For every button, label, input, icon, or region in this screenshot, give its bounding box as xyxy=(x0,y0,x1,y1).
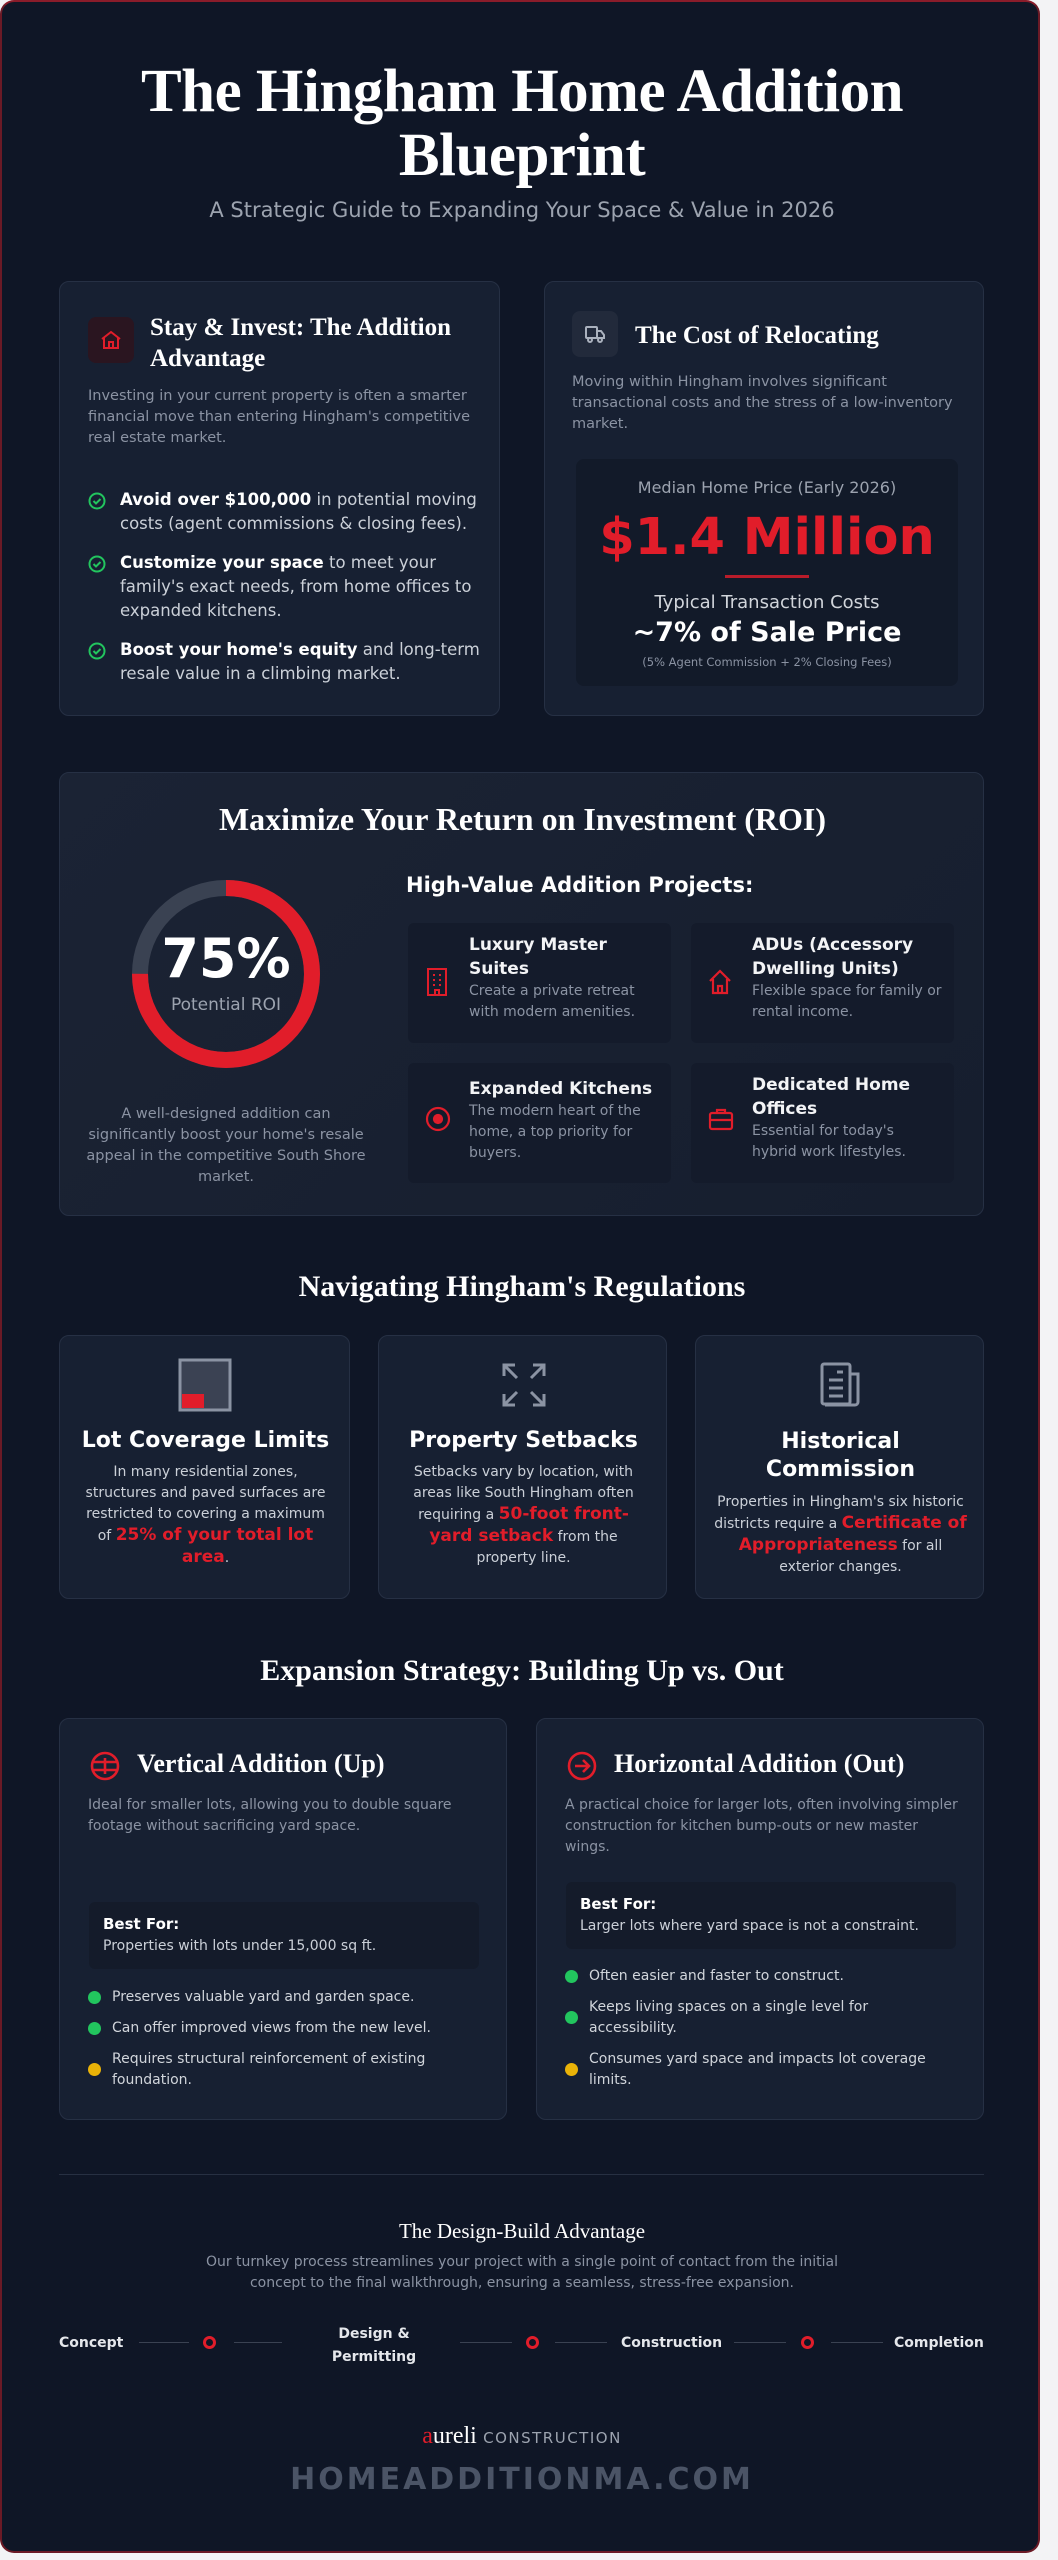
pros/cons list: Often easier and faster to construct. xyxy=(589,1968,844,1984)
bullet list: Boost your home's equity and long-term resale value in a climbing market. xyxy=(120,640,480,683)
icon: document xyxy=(820,1362,860,1406)
bullet list: Avoid over $100,000 in potential moving costs (agent commissions & closing fees). xyxy=(120,490,477,533)
pros/cons list: Consumes yard space and impacts lot coverage limits. xyxy=(589,2051,926,2088)
panel: horizontal xyxy=(536,1718,984,2120)
process timeline: Concept xyxy=(59,2335,123,2351)
best for box xyxy=(566,1882,956,1949)
panel: historical: Commission xyxy=(766,1457,915,1482)
panel: horizontal: A practical choice for larger lots, often involving simpler construction for kitchen bump-outs or new master wings. xyxy=(565,1797,958,1855)
panel: setbacks: Property Setbacks xyxy=(409,1428,638,1453)
process timeline: Design & Permitting xyxy=(332,2326,416,2365)
process timeline: Completion xyxy=(894,2335,984,2351)
icon: horizontal xyxy=(568,1752,596,1780)
icon: setback arrows xyxy=(502,1364,546,1406)
title: The Hingham Home Addition xyxy=(141,58,903,125)
panel: vertical: Vertical Addition (Up) xyxy=(137,1749,384,1778)
heading: The Cost of Relocating xyxy=(635,322,879,349)
project: expanded kitchens: Expanded Kitchens xyxy=(469,1079,652,1099)
process timeline xyxy=(59,2326,984,2365)
panel: horizontal: Horizontal Addition (Out) xyxy=(614,1749,904,1778)
project: home offices xyxy=(691,1063,954,1183)
panel: historical: Properties in Hingham's six historic districts require a Certificate of Appropriateness for all exterior changes. xyxy=(714,1494,967,1575)
panel: setbacks: Setbacks vary by location, with areas like South Hingham often requiring a 50-foot front-yard setback from the property line. xyxy=(413,1464,634,1566)
process timeline: Construction xyxy=(621,2335,722,2351)
project: ADUs xyxy=(691,923,954,1043)
title: Blueprint xyxy=(399,122,645,189)
pros/cons list xyxy=(565,1968,926,2088)
projects heading: High-Value Addition Projects: xyxy=(406,873,753,897)
design-build description: Our turnkey process streamlines your project with a single point of contact from the initial concept to the final walkthrough, ensuring a seamless, stress-free expansion. xyxy=(206,2254,838,2291)
project: luxury master suites: Luxury Master Suites xyxy=(469,935,607,979)
icon: truck xyxy=(572,311,618,357)
stat box: Median Home Price (Early 2026) xyxy=(638,478,896,497)
project: home offices: Dedicated Home Offices xyxy=(752,1075,910,1119)
big stat: $1.4 Million xyxy=(599,508,935,567)
best for box: Larger lots where yard space is not a constraint. xyxy=(580,1918,919,1934)
panel: lot coverage: Lot Coverage Limits xyxy=(82,1428,329,1453)
panel: cost of relocating xyxy=(544,281,984,716)
panel: lot coverage: In many residential zones, structures and paved surfaces are restricted to covering a maximum of 25% of your total lot area. xyxy=(86,1464,325,1567)
description: Moving within Hingham involves significant transactional costs and the stress of a low-inventory market. xyxy=(572,374,953,432)
heading: regulations: Navigating Hingham's Regulations xyxy=(299,1270,745,1303)
bullet list xyxy=(88,490,480,683)
pros/cons list: Preserves valuable yard and garden space. xyxy=(112,1989,414,2005)
panel: stay & invest xyxy=(59,281,500,716)
project: ADUs: Flexible space for family or rental income. xyxy=(752,983,942,1020)
donut chart: 75% xyxy=(161,927,291,990)
stat box xyxy=(576,459,958,686)
icon: lot xyxy=(178,1358,232,1412)
panel: setbacks xyxy=(378,1335,667,1599)
donut chart: Potential ROI xyxy=(171,995,281,1015)
pros/cons list: Requires structural reinforcement of existing foundation. xyxy=(112,2051,425,2088)
pros/cons list xyxy=(88,1989,431,2088)
project: home offices: Essential for today's hybrid work lifestyles. xyxy=(752,1123,906,1160)
best for box xyxy=(89,1902,479,1969)
panel: vertical xyxy=(59,1718,507,2120)
panel: lot coverage xyxy=(59,1335,350,1599)
description: Investing in your current property is often a smarter financial move than entering Hingham's competitive real estate market. xyxy=(88,388,470,446)
panel: vertical: Ideal for smaller lots, allowing you to double square footage without sacrificing yard space. xyxy=(88,1797,452,1834)
panel: historical: Historical xyxy=(781,1429,900,1454)
bullet list: Customize your space to meet your family's exact needs, from home offices to expanded kitchens. xyxy=(120,553,472,620)
best for box: Best For: xyxy=(103,1915,179,1933)
subtitle: A Strategic Guide to Expanding Your Space & Value in 2026 xyxy=(209,198,835,222)
website: HOMEADDITIONMA.COM xyxy=(290,2462,754,2497)
project: luxury master suites: Create a private retreat with modern amenities. xyxy=(469,983,635,1020)
project: expanded kitchens: The modern heart of the home, a top priority for buyers. xyxy=(469,1103,641,1161)
panel: ROI xyxy=(59,772,984,1216)
best for box: Best For: xyxy=(580,1895,656,1913)
best for box: Properties with lots under 15,000 sq ft. xyxy=(103,1938,376,1954)
logo: aureli CONSTRUCTION xyxy=(422,2423,622,2449)
project: luxury master suites xyxy=(408,923,671,1043)
stat box: ~7% of Sale Price xyxy=(633,617,901,648)
project: expanded kitchens xyxy=(408,1063,671,1183)
heading: Stay & Invest: The Addition Advantage xyxy=(150,314,451,372)
heading: expansion: Expansion Strategy: Building Up vs. Out xyxy=(260,1654,784,1687)
ROI description: A well-designed addition can significantly boost your home's resale appeal in the competitive South Shore market. xyxy=(86,1106,366,1185)
icon: house xyxy=(88,317,134,363)
stat box: (5% Agent Commission + 2% Closing Fees) xyxy=(642,655,892,669)
pros/cons list: Keeps living spaces on a single level for accessibility. xyxy=(589,1999,868,2036)
donut chart xyxy=(132,880,320,1068)
stat box: Typical Transaction Costs xyxy=(654,592,880,613)
project: ADUs: ADUs (Accessory Dwelling Units) xyxy=(752,935,913,979)
icon: vertical xyxy=(90,1752,120,1780)
panel: historical xyxy=(695,1335,984,1599)
heading: Maximize Your Return on Investment (ROI) xyxy=(219,801,826,837)
title xyxy=(141,58,903,189)
pros/cons list: Can offer improved views from the new level. xyxy=(112,2020,431,2036)
heading: design-build: The Design-Build Advantage xyxy=(399,2219,645,2243)
